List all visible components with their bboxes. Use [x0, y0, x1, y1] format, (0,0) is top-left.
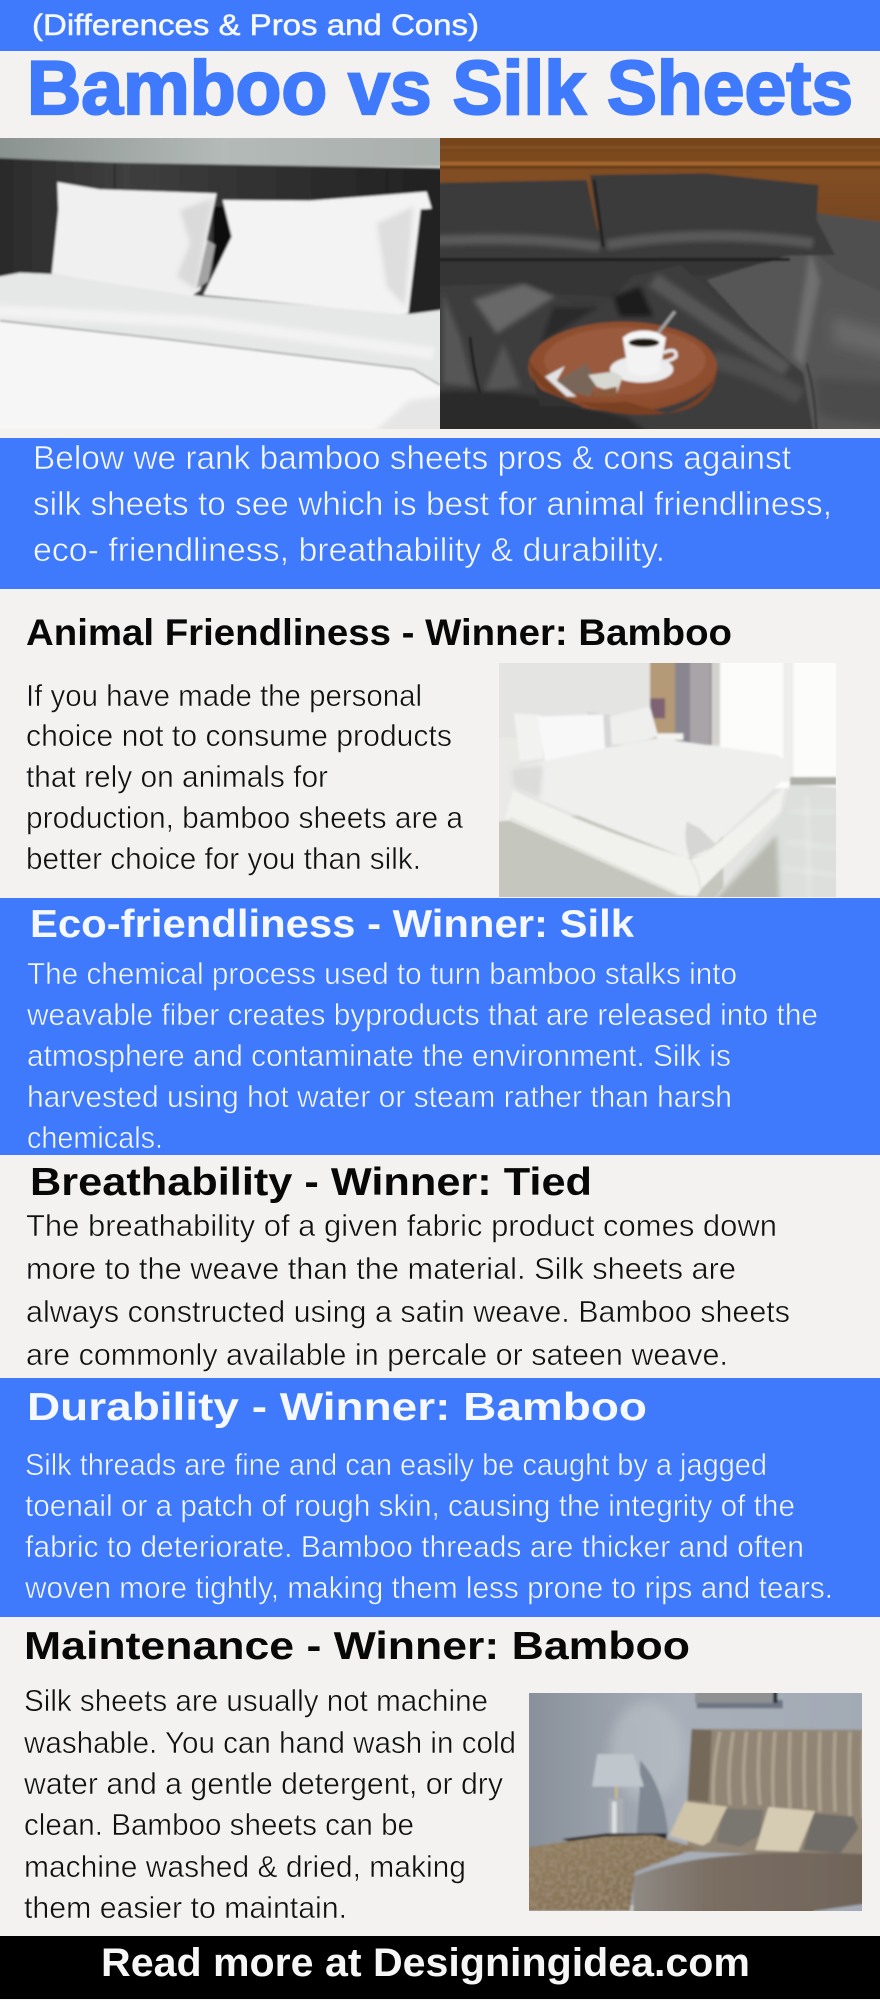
heading: durability: Durability - Winner: Bamboo — [27, 1386, 647, 1429]
panel: eco-friendliness — [0, 898, 880, 1155]
heading: animal friendliness: Animal Friendliness - Winner: Bamboo — [26, 612, 732, 653]
text: animal friendliness: better choice for you than silk. — [26, 841, 421, 876]
text: animal friendliness: choice not to consume products — [26, 718, 452, 753]
title: Bamboo vs Silk Sheets — [27, 46, 853, 131]
text: maintenance: them easier to maintain. — [24, 1890, 347, 1925]
text: eco-friendliness — [26, 956, 818, 1155]
text: breathability: always constructed using a satin weave. Bamboo sheets — [26, 1294, 790, 1329]
text: maintenance: clean. Bamboo sheets can be — [24, 1807, 414, 1842]
text: animal friendliness — [26, 678, 464, 876]
photo: white hotel bed — [499, 663, 836, 897]
text: eco-friendliness: harvested using hot water or steam rather than harsh — [27, 1079, 732, 1114]
intro text: Below we rank bamboo sheets pros & cons against — [33, 439, 791, 476]
text: durability: toenail or a patch of rough skin, causing the integrity of the — [25, 1488, 795, 1523]
intro text — [33, 439, 832, 568]
panel: durability — [0, 1378, 880, 1617]
text: eco-friendliness: The chemical process used to turn bamboo stalks into — [27, 956, 737, 991]
heading: breathability: Breathability - Winner: Tied — [30, 1161, 592, 1204]
text: animal friendliness: that rely on animals for — [26, 759, 328, 794]
text: maintenance: washable. You can hand wash in cold — [23, 1725, 516, 1760]
text: maintenance: machine washed & dried, making — [24, 1849, 466, 1884]
text: eco-friendliness: weavable fiber creates byproducts that are released into the — [26, 997, 818, 1032]
text: animal friendliness: If you have made the personal — [26, 678, 422, 713]
photo: white bamboo sheets bed — [0, 138, 440, 429]
text: animal friendliness: production, bamboo sheets are a — [26, 800, 464, 835]
text: maintenance: water and a gentle detergent, or dry — [23, 1766, 503, 1801]
photo: grey silk sheets with tray — [440, 138, 880, 429]
text: durability: fabric to deteriorate. Bamboo threads are thicker and often — [25, 1529, 804, 1564]
photo: taupe bedroom with lamp — [529, 1693, 862, 1911]
text: maintenance: Silk sheets are usually not machine — [24, 1683, 488, 1718]
text: breathability: The breathability of a given fabric product comes down — [26, 1208, 777, 1243]
text: eco-friendliness: chemicals. — [27, 1120, 163, 1155]
intro text: eco- friendliness, breathability & durability. — [33, 531, 665, 568]
footer call to action — [0, 1936, 880, 1999]
top subtitle band — [0, 0, 880, 51]
top subtitle band: (Differences & Pros and Cons) — [32, 9, 479, 42]
text: eco-friendliness: atmosphere and contaminate the environment. Silk is — [27, 1038, 731, 1073]
footer call to action: Read more at Designingidea.com — [101, 1941, 750, 1985]
text: breathability: are commonly available in percale or sateen weave. — [26, 1337, 728, 1372]
intro text: silk sheets to see which is best for animal friendliness, — [33, 485, 832, 522]
text: durability — [24, 1447, 833, 1605]
text: maintenance — [23, 1683, 516, 1925]
text: durability: woven more tightly, making them less prone to rips and tears. — [24, 1570, 833, 1605]
heading: maintenance: Maintenance - Winner: Bamboo — [24, 1625, 690, 1668]
text: breathability: more to the weave than the material. Silk sheets are — [26, 1251, 736, 1286]
heading: eco-friendliness: Eco-friendliness - Winner: Silk — [30, 903, 634, 946]
text: durability: Silk threads are fine and can easily be caught by a jagged — [25, 1447, 767, 1482]
text: breathability — [26, 1208, 790, 1372]
intro panel — [0, 438, 880, 589]
